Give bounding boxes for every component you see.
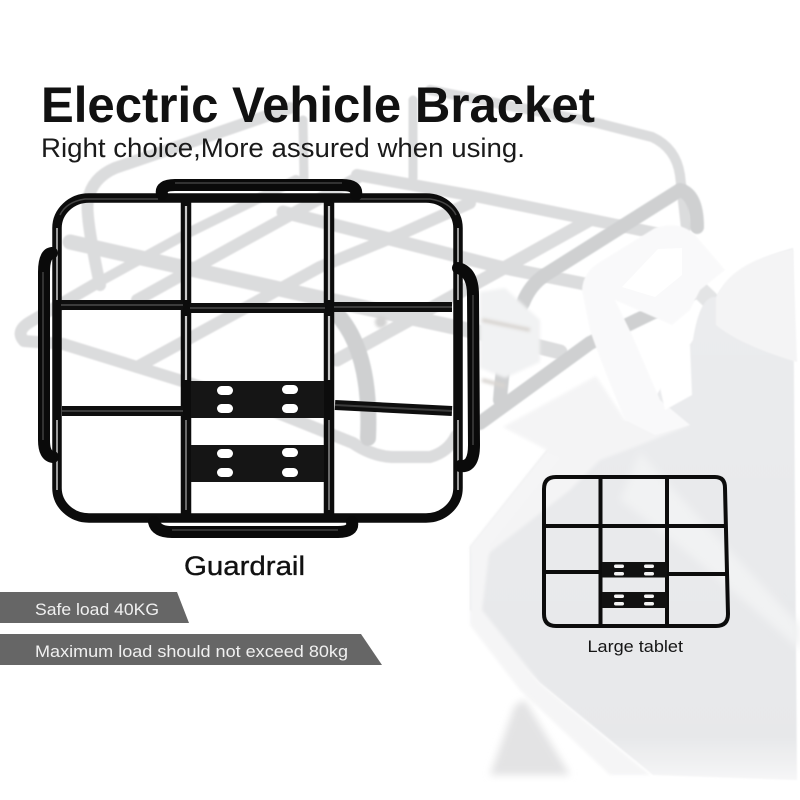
guardrail rack product: [43, 183, 474, 532]
white backrest: [582, 225, 725, 435]
spec ribbon: safe load: [0, 592, 189, 623]
seat underside body: [470, 248, 797, 780]
large tablet label: Large tablet: [588, 637, 683, 656]
lower fairing panel: [470, 376, 690, 560]
spec ribbon: maximum load: [0, 634, 382, 665]
spec ribbon: safe load: Safe load 40KG: [35, 601, 159, 619]
rack frame: [57, 198, 458, 518]
ghost mechanical parts: [375, 288, 540, 386]
mounting plates: [191, 381, 324, 482]
spec ribbon: maximum load: Maximum load should not exceed 80kg: [35, 643, 348, 661]
subtitle: Right choice,More assured when using.: [41, 133, 525, 163]
left bike fairing: [470, 452, 650, 775]
guard bars: [44, 185, 474, 532]
large tablet rack product: [544, 477, 728, 626]
seat top: [716, 249, 797, 362]
light streaks on body: [620, 452, 800, 650]
guardrail label: Guardrail: [184, 551, 305, 581]
ghost rack: [21, 90, 686, 457]
title: Electric Vehicle Bracket: [41, 77, 595, 133]
